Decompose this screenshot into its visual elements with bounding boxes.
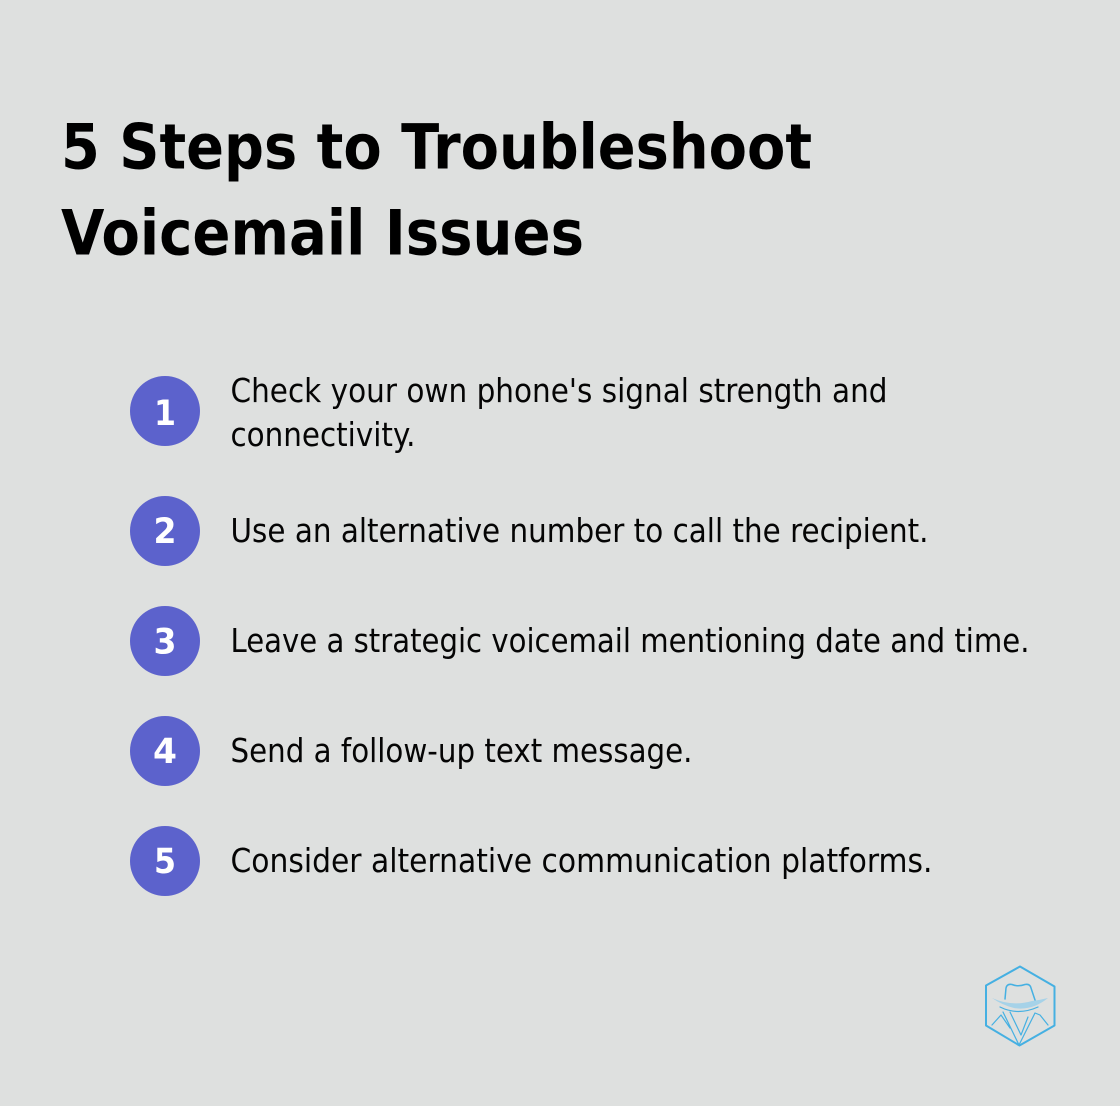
step 1 text: Check your own phone's signal strength and — [230, 372, 888, 410]
step 2 text: Use an alternative number to call the recipient. — [230, 512, 928, 550]
step 5 number badge — [130, 826, 200, 896]
step 2 — [130, 496, 928, 566]
step 4 number badge — [130, 716, 200, 786]
step 2 number badge — [130, 496, 200, 566]
title: Voicemail Issues — [61, 196, 584, 270]
icon: hexagon spy logo — [986, 966, 1054, 1046]
step 4 — [130, 716, 692, 786]
step 1 — [130, 372, 888, 454]
step 4 number badge: 4 — [153, 732, 177, 772]
step 3 number badge — [130, 606, 200, 676]
step 3 text: Leave a strategic voicemail mentioning date and time. — [230, 622, 1030, 660]
step 5 text: Consider alternative communication platforms. — [230, 842, 932, 880]
title — [61, 110, 812, 270]
logo hat brim — [992, 998, 1048, 1009]
step 1 number badge: 1 — [154, 394, 176, 434]
step 3 — [130, 606, 1030, 676]
title: 5 Steps to Troubleshoot — [61, 110, 812, 184]
step 2 number badge: 2 — [154, 512, 176, 552]
logo face and collar — [992, 1007, 1048, 1045]
logo hat — [1005, 984, 1035, 1000]
step 1 number badge — [130, 376, 200, 446]
step 3 number badge: 3 — [154, 622, 176, 662]
step 1 text: connectivity. — [230, 416, 416, 454]
logo hexagon outline — [986, 966, 1054, 1046]
step 5 — [130, 826, 932, 896]
step 1 text — [230, 372, 888, 454]
step 4 text: Send a follow-up text message. — [230, 732, 692, 770]
step 5 number badge: 5 — [154, 842, 176, 882]
